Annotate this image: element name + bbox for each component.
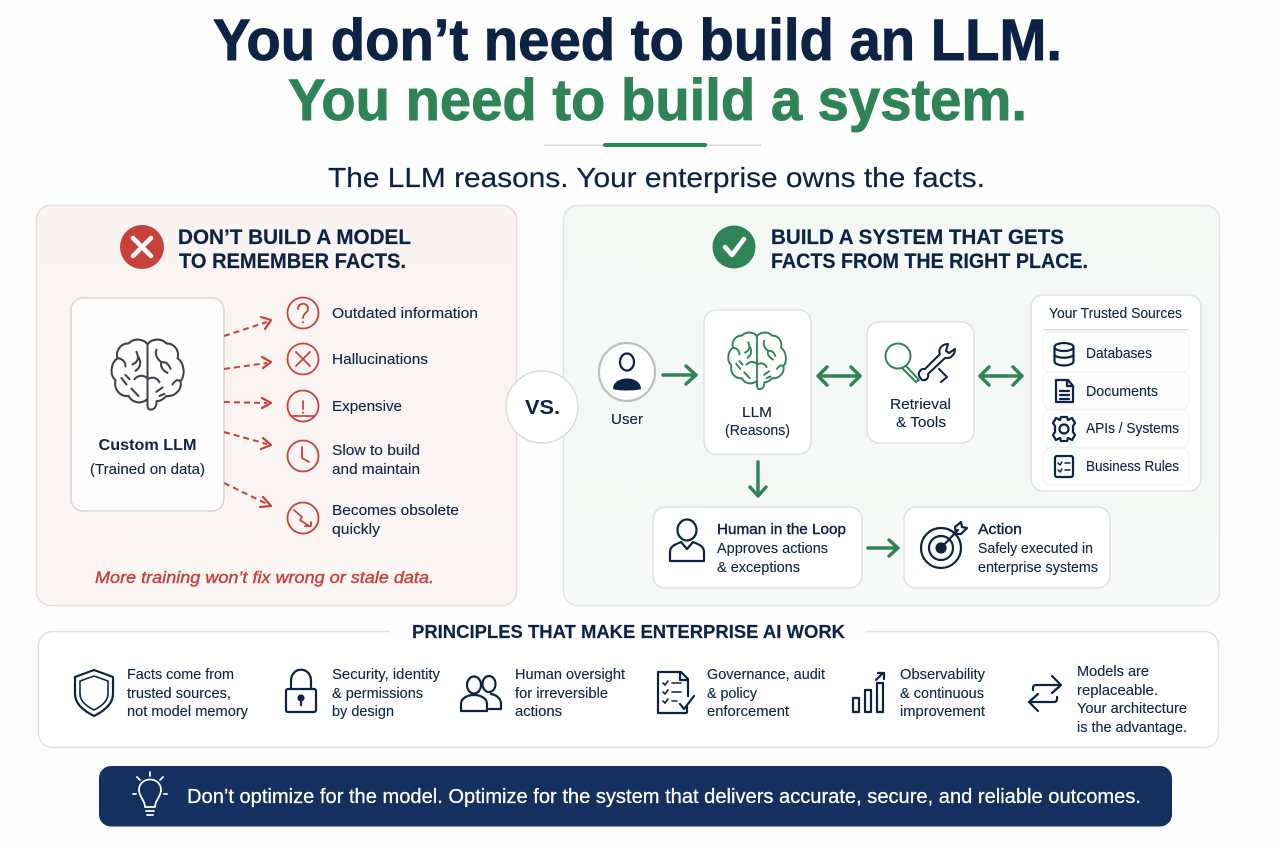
- human label: & exceptions: [717, 560, 800, 576]
- right panel heading: [771, 226, 1088, 273]
- principle: human oversight: Human oversight: [515, 667, 625, 683]
- principle: security: & permissions: [332, 686, 423, 702]
- retrieval label: [890, 397, 951, 431]
- icon: cross circle: [288, 344, 318, 374]
- principle: security: [286, 667, 441, 720]
- drawback list: [332, 305, 478, 538]
- action label: Safely executed in: [978, 541, 1093, 557]
- LLM label: (Reasons): [725, 423, 790, 439]
- icon: person: [670, 520, 704, 561]
- subtitle: The LLM reasons. Your enterprise owns the facts.: [328, 162, 985, 193]
- action label: Action: [978, 522, 1022, 538]
- panel: trusted sources: [1031, 295, 1201, 491]
- custom LLM label: (Trained on data): [90, 461, 205, 478]
- drawback list: Expensive: [332, 398, 402, 415]
- right panel heading: BUILD A SYSTEM THAT GETS: [771, 226, 1064, 249]
- principle: observability: Observability: [900, 667, 986, 683]
- icon: question: [288, 298, 318, 328]
- principle: security: by design: [332, 704, 394, 720]
- node: user: [599, 343, 655, 428]
- drawback list: Hallucinations: [332, 351, 428, 368]
- custom LLM label: [90, 437, 205, 478]
- icon: target: [921, 522, 967, 568]
- icon: clock: [288, 440, 318, 472]
- drawback list: Becomes obsolete: [332, 502, 459, 519]
- source: documents: [1043, 372, 1189, 409]
- drawback list: and maintain: [332, 461, 420, 478]
- principle: governance: [658, 667, 825, 720]
- banner: [99, 766, 1172, 826]
- arrow: user to LLM: [663, 366, 696, 384]
- arrow: retrieval to sources: [980, 367, 1022, 385]
- retrieval label: Retrieval: [890, 397, 951, 413]
- node: human in the loop: [653, 507, 862, 588]
- icon: green brain: [728, 333, 786, 389]
- principle: observability: & continuous: [900, 686, 984, 702]
- principle: replaceable models: [1029, 664, 1187, 736]
- drawback list: quickly: [332, 521, 381, 538]
- panel: don't build a model: [36, 206, 516, 606]
- custom LLM label: Custom LLM: [98, 437, 196, 454]
- principles heading: PRINCIPLES THAT MAKE ENTERPRISE AI WORK: [412, 622, 845, 642]
- node: user: User: [611, 412, 643, 428]
- icon: red cross: [120, 225, 164, 269]
- icon: green check: [712, 226, 756, 268]
- source: APIs and systems: [1043, 410, 1189, 447]
- action label: enterprise systems: [978, 560, 1098, 576]
- left panel heading: TO REMEMBER FACTS.: [179, 250, 406, 273]
- principle: observability: improvement: [900, 704, 985, 720]
- human label: Human in the Loop: [717, 522, 846, 538]
- principle: replaceable models: is the advantage.: [1077, 720, 1187, 736]
- drawback list: Outdated information: [332, 305, 478, 322]
- icon: magnifier and wrench: [886, 344, 955, 382]
- source: databases: Databases: [1086, 346, 1152, 362]
- principle: replaceable models: replaceable.: [1077, 683, 1158, 699]
- node: LLM: [704, 310, 811, 454]
- banner text: Don’t optimize for the model. Optimize for the system that delivers accurate, secure, and reliable outcomes.: [187, 786, 1141, 808]
- panel: principles: [38, 622, 1218, 748]
- principle: trusted sources: not model memory: [127, 704, 249, 720]
- panel: trusted sources: Your Trusted Sources: [1049, 306, 1182, 322]
- principle: governance: enforcement: [707, 704, 789, 720]
- principle: replaceable models: Your architecture: [1077, 701, 1187, 717]
- card: custom LLM: [71, 298, 224, 511]
- LLM label: [725, 404, 790, 439]
- source: databases: [1043, 332, 1189, 372]
- principle: replaceable models: Models are: [1077, 664, 1149, 680]
- arrows: dashed red: [224, 317, 271, 507]
- source: business rules: Business Rules: [1086, 459, 1179, 475]
- arrow: LLM to retrieval: [818, 367, 860, 385]
- human label: Approves actions: [717, 541, 828, 557]
- drawback list: Slow to build: [332, 442, 420, 459]
- retrieval label: & Tools: [896, 415, 946, 431]
- LLM label: LLM: [742, 404, 772, 421]
- principle: trusted sources: [75, 667, 249, 720]
- principle: human oversight: [461, 667, 625, 720]
- icon: declining trend: [288, 502, 318, 534]
- icon: brain: [112, 340, 184, 410]
- node: retrieval and tools: [867, 322, 974, 443]
- right panel heading: FACTS FROM THE RIGHT PLACE.: [771, 250, 1088, 273]
- title: [213, 8, 1062, 133]
- principle: trusted sources: Facts come from: [127, 667, 234, 683]
- title: You don’t need to build an LLM.: [213, 8, 1062, 73]
- VS badge: VS.: [525, 397, 560, 419]
- source: documents: Documents: [1086, 384, 1158, 400]
- title divider: [544, 143, 761, 147]
- node: action: [904, 507, 1110, 588]
- icon: light bulb: [133, 772, 167, 815]
- principle: governance: Governance, audit: [707, 667, 825, 683]
- arrow: LLM to human: [750, 462, 766, 496]
- VS badge: [506, 371, 578, 443]
- source: APIs and systems: APIs / Systems: [1086, 421, 1179, 437]
- principle: trusted sources: trusted sources,: [127, 686, 231, 702]
- principle: governance: & policy: [707, 686, 758, 702]
- principle: security: Security, identity: [332, 667, 441, 683]
- human label: [717, 522, 846, 576]
- principle: human oversight: actions: [515, 704, 562, 720]
- left panel heading: [178, 226, 411, 273]
- action label: [978, 522, 1098, 576]
- title: You need to build a system.: [288, 68, 1027, 133]
- principle: human oversight: for irreversible: [515, 686, 608, 702]
- panel: build a system: [564, 206, 1220, 606]
- left panel heading: DON’T BUILD A MODEL: [178, 226, 411, 249]
- arrow: human to action: [868, 540, 898, 556]
- callout: stale data warning: More training won’t fix wrong or stale data.: [95, 568, 434, 587]
- source: business rules: [1043, 448, 1189, 485]
- principle: observability: [853, 667, 986, 720]
- icon: expensive warning: [288, 390, 318, 422]
